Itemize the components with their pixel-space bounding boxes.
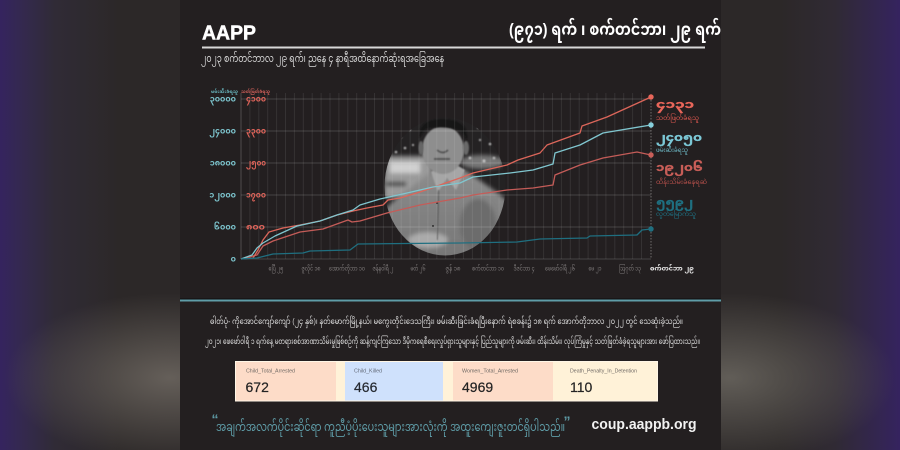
website: coup.aappb.org [592, 417, 696, 433]
y axis: arrested scale: ၃၀၀၀၀ [210, 94, 236, 106]
end value: arrested: ၂၄၀၅၀ [656, 132, 702, 146]
x axis labels: ဧပြီ ၂၅ [268, 264, 284, 274]
grid [241, 93, 651, 259]
header [201, 17, 721, 67]
end value: arrested [656, 132, 702, 156]
section divider [180, 298, 721, 302]
end value: released: ၅၅၉၂ [656, 197, 693, 211]
card: women total arrested: Women_Total_Arrested [462, 368, 518, 374]
shirt shading [408, 232, 448, 248]
line chart [209, 87, 707, 274]
x axis labels: စက်တင်ဘာ ၂၉ [650, 264, 694, 274]
shirt and shoulders [386, 168, 505, 256]
card: women total arrested: 4969 [462, 379, 493, 395]
caption paragraph: ဓါတ်ပုံ- ကိုအောင်ကျော်ကျော် (၂၄ နှစ်)၊ နတ်မောက်မြို့နယ်၊ မကွေးတိုင်းဒေသကြီး၊ ဖမ်းဆီးခြင်းခံရပြီးနောက် ရဲစခန်း၌ ၁၈ ရက် အောက်တိုဘာလ ၂၀၂၂ တွင် သေဆုံးခဲ့သည်။ [210, 314, 683, 329]
header rule [202, 46, 705, 48]
y axis: killed scale: ၁၇၀၀ [246, 190, 266, 202]
card: child total arrested: Child_Total_Arrested [246, 368, 295, 374]
end value: detained: ၁၉၂၀၆ [656, 160, 703, 176]
card: death penalty in detention [560, 362, 657, 400]
series end markers [648, 94, 654, 232]
end value: detained: ထိန်းသိမ်းခံနေရဆဲ [656, 176, 707, 187]
x axis labels: ဇွန် ၁၈ [446, 264, 461, 274]
y axis: killed scale: ၈၀၀ [246, 222, 265, 232]
card: child total arrested: 672 [246, 379, 269, 395]
x axis labels: စက်တင်ဘာ ၁၀ [472, 264, 504, 272]
x axis labels: အောက်တိုဘာ ၁၀ [329, 264, 365, 274]
y axis: arrested scale [209, 94, 236, 264]
y axis: arrested scale: ၁၂၀၀၀ [209, 190, 236, 202]
series: arrested [241, 125, 651, 259]
stat cards [235, 361, 658, 402]
x axis labels: ဒီဇင်ဘာ ၄ [514, 264, 535, 274]
y axis legend captions: သတ်ဖြတ်ခံရသူ [241, 87, 271, 96]
main dark panel [180, 0, 721, 450]
y axis: killed scale: ၃၃၀၀ [246, 126, 266, 138]
neck and face [422, 126, 464, 174]
y axis: killed scale [246, 94, 266, 232]
card: child killed: Child_Killed [354, 368, 382, 374]
y axis: arrested scale: ၂၄၀၀၀ [209, 126, 236, 138]
x axis labels: မေ ၂၁ [588, 266, 602, 274]
y axis: arrested scale: ၆၀၀၀ [214, 220, 236, 232]
y axis: arrested scale: ၀ [231, 254, 236, 264]
infographic canvas [180, 0, 721, 450]
x axis labels: မတ် ၂၆ [410, 264, 426, 274]
x axis labels: ဖေဖော်ဝါရီ ၂၆ [545, 264, 576, 274]
y axis legend captions: ဖမ်းဆီးခံရသူ [211, 87, 239, 96]
end value: detained [656, 160, 707, 187]
closing quote mark: ” [564, 413, 570, 429]
end value: killed [656, 99, 699, 124]
series: released [241, 229, 651, 259]
card: child killed: 466 [354, 379, 378, 395]
opening quote mark: “ [212, 411, 218, 427]
y axis: arrested scale: ၁၈၀၀၀ [210, 158, 236, 168]
end value: arrested: ဖမ်းဆီးခံရသူ [656, 144, 688, 156]
x axis labels: ဩဂုတ် ၁၃ [619, 264, 641, 274]
title: AAPP: AAPP [202, 22, 256, 44]
title: day count and date: (၉၇၁) ရက် ၊ စက်တင်ဘာ၊ ၂၉ ရက် [509, 17, 721, 43]
footer [212, 411, 696, 437]
thanks message: အချက်အလက်ပိုင်းဆိုင်ရာ ကူညီပံ့ပိုးပေးသူများအားလုံးကို အထူးကျေးဇူးတင်ရှိပါသည်။ [216, 418, 565, 437]
end value: killed: သတ်ဖြတ်ခံရသူ [656, 112, 699, 124]
x axis labels: ဇန်နဝါရီ ၂ [372, 264, 394, 274]
end value: killed: ၄၁၃၁ [656, 99, 695, 113]
card: child killed [345, 362, 443, 400]
series: killed [241, 97, 651, 259]
end value: released: လွတ်မြောက်သူ [656, 208, 696, 220]
end value: released [656, 197, 696, 220]
x axis labels: ဇူလိုင် ၁၈ [302, 264, 321, 274]
card: child total arrested [236, 362, 336, 400]
x axis labels [268, 264, 694, 274]
portrait photo [384, 119, 505, 256]
subtitle: ၂၀၂၃ စက်တင်ဘာလ ၂၉ ရက်၊ ညနေ ၄ နာရီအထိနောက်ဆုံးရအခြေအနေ [201, 51, 444, 67]
card: death penalty in detention: Death_Penalty_In_Detention [570, 368, 637, 374]
card: women total arrested [453, 362, 553, 400]
card: death penalty in detention: 110 [570, 379, 593, 395]
caption paragraph [205, 314, 700, 349]
series: detained [241, 152, 651, 259]
y axis: killed scale: ၄၁၀၀ [246, 94, 266, 106]
y axis: killed scale: ၂၅၀၀ [246, 158, 266, 170]
y axis legend captions [211, 87, 271, 96]
